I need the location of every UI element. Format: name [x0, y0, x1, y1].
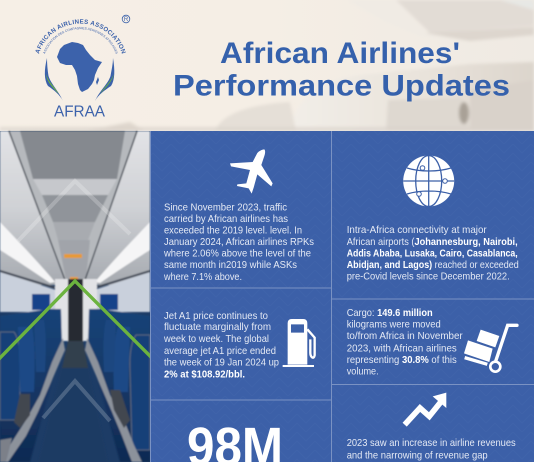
green chevron — [0, 281, 152, 360]
title: Performance Updates — [173, 70, 510, 102]
traffic text — [163, 202, 314, 283]
cargo text — [347, 308, 463, 378]
traffic text: January 2024, African airlines RPKs — [164, 237, 314, 248]
title — [173, 37, 510, 102]
jet fuel text: week to week. The global — [163, 334, 269, 345]
icon: airplane — [230, 149, 273, 194]
logo left leaf — [45, 58, 63, 101]
icon: fuel pump — [283, 319, 315, 367]
cargo text: to/from Africa in November — [347, 331, 463, 342]
panel: revenues — [347, 393, 516, 462]
cargo text: kilograms were moved — [347, 320, 441, 330]
window band — [0, 272, 56, 312]
header background with aircraft — [0, 0, 534, 131]
registered mark: R — [124, 17, 129, 23]
right seats — [88, 309, 150, 462]
connectivity text — [347, 225, 519, 282]
cargo text: representing 30.8% of this — [347, 355, 457, 366]
light strips — [0, 222, 55, 283]
jet fuel text: average jet A1 price ended — [164, 346, 276, 357]
faint floor chevron — [43, 381, 110, 421]
connectivity text: pre-Covid levels since December 2022. — [347, 272, 510, 282]
panel: traffic — [163, 149, 314, 283]
rear bulkhead — [55, 279, 97, 341]
jet fuel text — [163, 311, 279, 380]
traffic text: where 7.1% above. — [163, 272, 242, 283]
cargo text: Cargo: 149.6 million — [347, 308, 433, 319]
icon: hand truck — [464, 325, 517, 372]
cargo text: volume. — [347, 366, 379, 378]
logo wordmark: AFRAA — [54, 104, 106, 120]
blue panels background — [150, 131, 534, 462]
logo right leaf — [95, 58, 114, 101]
jet fuel text: fluctuate marginally from — [164, 322, 271, 333]
logo inner ring text: ASSOCIATION DES COMPAGNIES AERIENNES AFRICAINES — [43, 26, 118, 54]
traffic text: where 2.06% above the level of the — [163, 248, 311, 260]
cargo text: 2023, with African airlines — [347, 344, 457, 354]
panel: jet fuel — [163, 311, 315, 380]
revenues text: 2023 saw an increase in airline revenues — [347, 438, 516, 449]
panel: cargo — [347, 308, 517, 378]
icon: rising arrow — [405, 393, 446, 425]
icon: globe — [403, 156, 454, 206]
armrests — [0, 338, 65, 462]
panel: connectivity — [347, 156, 519, 282]
logo ring text: AFRICAN AIRLINES ASSOCIATION — [36, 19, 126, 54]
logo: AFRAA — [36, 14, 130, 120]
title: African Airlines' — [220, 37, 460, 70]
traffic text: exceeded the 2019 level. level. In — [164, 226, 302, 236]
jet fuel text: the week of 19 Jan 2024 up — [164, 358, 279, 368]
jet fuel text: Jet A1 price continues to — [164, 311, 268, 322]
ceiling panel — [8, 131, 138, 282]
left seats — [0, 309, 62, 462]
connectivity text: Abidjan, and Lagos) reached or exceeded — [347, 260, 519, 271]
logo africa map — [57, 42, 102, 92]
faint ceiling chevron — [18, 181, 130, 241]
traffic text: Since November 2023, traffic — [164, 202, 287, 214]
connectivity text: Intra-Africa connectivity at major — [347, 225, 487, 236]
side walls — [0, 131, 68, 285]
traffic text: same month in2019 while ASKs — [164, 260, 297, 271]
aisle floor — [38, 341, 108, 462]
jet fuel text: 2% at $108.92/bbl. — [164, 370, 245, 380]
revenues text: and the narrowing of revenue gap — [347, 450, 488, 462]
cabin photo with green chevron — [0, 131, 152, 462]
connectivity text: African airports (Johannesburg, Nairobi, — [347, 237, 518, 248]
revenues text — [347, 438, 516, 462]
traffic text: carried by African airlines has — [164, 214, 288, 225]
